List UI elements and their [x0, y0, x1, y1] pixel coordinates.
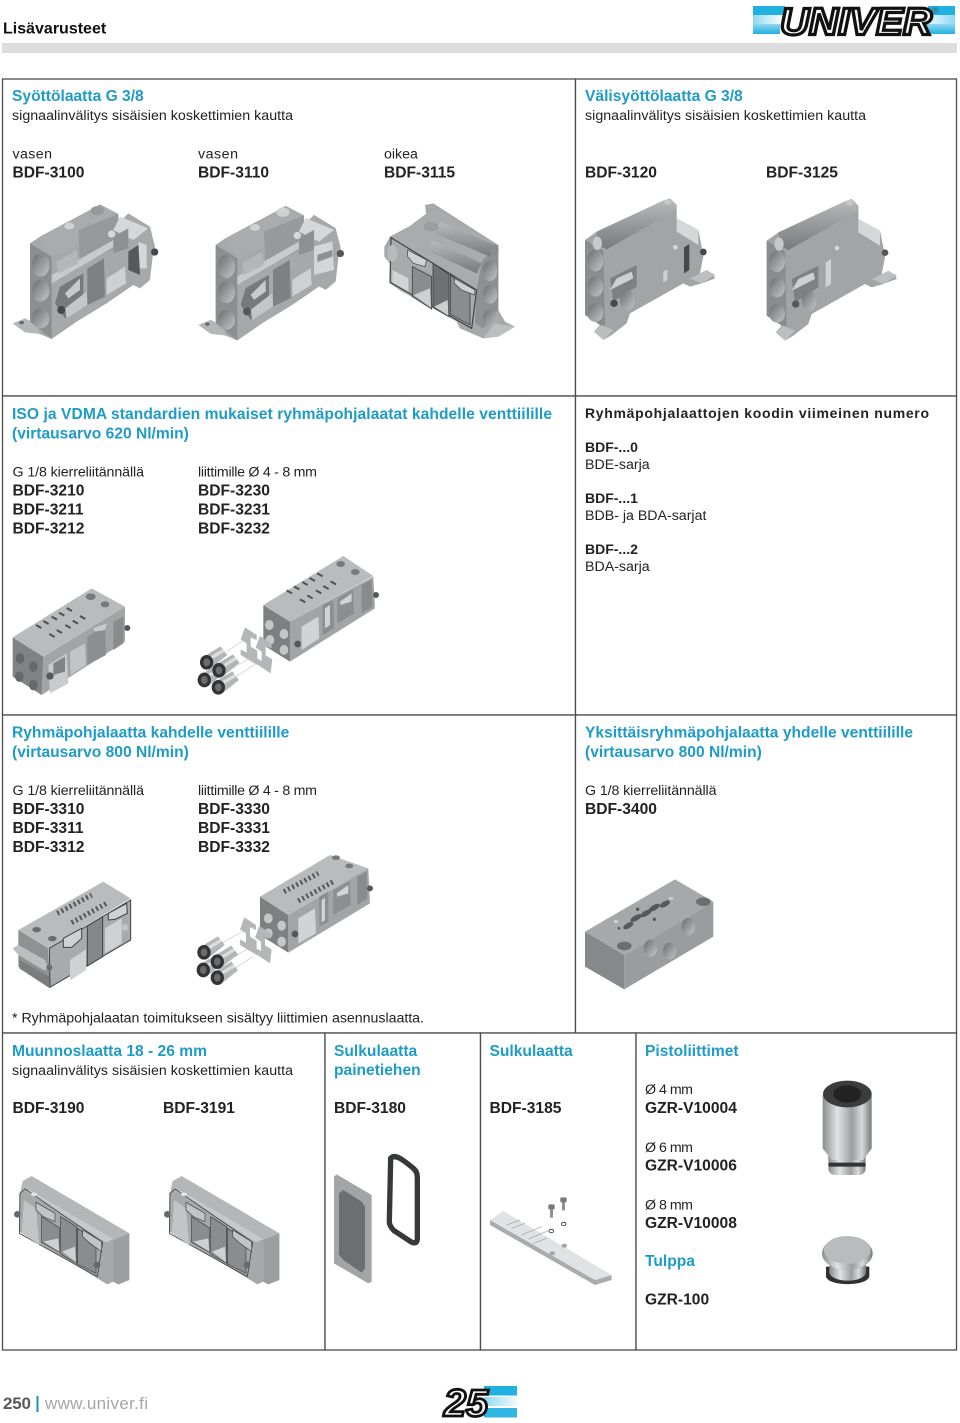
product: BDF-3100: [13, 204, 158, 339]
footer: page number and website: www.univer.fi: [44, 1394, 148, 1413]
heading: (virtausarvo 620 Nl/min): [12, 426, 189, 442]
code: [585, 783, 717, 818]
page title: Lisävarusteet: [3, 20, 107, 38]
panel: Pistoliittimet: [636, 1033, 956, 1350]
heading: (virtausarvo 800 Nl/min): [12, 744, 189, 761]
product: BDF-3230 with fittings: [198, 556, 379, 695]
code list: G 1/8: BDF-3310: [12, 801, 85, 818]
code key list: BDE-sarja: [585, 457, 650, 473]
heading: Sulkulaatta: [490, 1043, 573, 1060]
panel: Sulkulaatta painetiehen: [325, 1033, 480, 1350]
product: BDF-3120: [585, 198, 715, 340]
codes: BDF-3190: [12, 1100, 85, 1117]
codes: [12, 146, 455, 182]
code list: G 1/8: BDF-3212: [12, 520, 85, 538]
panel: Välisyöttölaatta G 3/8: [576, 79, 956, 396]
heading: Ryhmäpohjalaattojen koodin viimeinen numero: [585, 405, 929, 421]
codes: oikea: [384, 146, 418, 162]
codes: BDF-3115: [384, 164, 455, 182]
heading: [585, 724, 913, 761]
code list: liittimille: BDF-3232: [198, 520, 270, 538]
fitting codes: Ø 6 mm: [645, 1140, 693, 1156]
code list: liittimille: BDF-3330: [198, 801, 270, 818]
fitting codes: GZR-V10006: [645, 1158, 737, 1174]
product: BDF-3115: [384, 203, 515, 338]
code: BDF-3185: [490, 1100, 562, 1117]
product: BDF-3210: [13, 588, 130, 695]
code list: liittimille: BDF-3231: [198, 502, 270, 518]
code list: G 1/8: [12, 783, 144, 856]
code list: liittimille: [198, 783, 317, 856]
code list: liittimille: BDF-3331: [198, 820, 270, 837]
code key list: [585, 439, 706, 575]
code: BDF-3400: [585, 801, 657, 818]
code list: G 1/8: BDF-3312: [12, 839, 85, 856]
codes: BDF-3125: [766, 164, 838, 182]
logo: Univer: UNIVER: [780, 2, 933, 44]
fitting codes: GZR-V10004: [645, 1100, 737, 1117]
code list: liittimille: [198, 464, 317, 538]
header rule bar: [2, 43, 957, 53]
product: BDF-3400: [585, 879, 713, 989]
icon: push-in fitting: [823, 1081, 872, 1175]
subtitle: signaalinvälitys sisäisien koskettimien kautta: [12, 108, 293, 124]
heading: Syöttölaatta G 3/8: [12, 88, 144, 105]
panel: Ryhmäpohjalaattojen koodin viimeinen numero: [576, 396, 956, 715]
code list: liittimille: BDF-3230: [198, 482, 270, 500]
subtitle: signaalinvälitys sisäisien koskettimien kautta: [585, 108, 866, 124]
icon: plug: [822, 1236, 873, 1284]
heading: Sulkulaatta: [334, 1043, 418, 1060]
footnote: * Ryhmäpohjalaatan toimitukseen sisältyy liittimien asennuslaatta.: [12, 1010, 424, 1026]
panel: Ryhmäpohjalaatta kahdelle venttiilille: [2, 715, 576, 1033]
footer: page number and website: 250: [3, 1394, 31, 1413]
codes: [12, 1100, 235, 1117]
code list: G 1/8: BDF-3211: [12, 502, 84, 518]
code key list: BDF-...2: [585, 541, 638, 557]
panel: Yksittäisryhmäpohjalaatta: [576, 715, 956, 1033]
product: BDF-3185: [490, 1197, 612, 1285]
fitting codes: GZR-V10008: [645, 1215, 737, 1232]
heading: painetiehen: [334, 1062, 421, 1079]
code: BDF-3180: [334, 1100, 406, 1117]
heading: Ryhmäpohjalaatta kahdelle venttiilille: [12, 724, 290, 742]
codes: BDF-3191: [163, 1100, 235, 1117]
fitting codes: Ø 4 mm: [645, 1082, 693, 1098]
codes: BDF-3110: [198, 164, 269, 182]
product: BDF-3310: [13, 882, 131, 988]
code list: liittimille: liittimille Ø 4 - 8 mm: [198, 783, 317, 799]
code key list: BDA-sarja: [585, 559, 650, 575]
codes: vasen: [198, 146, 238, 162]
code: GZR-100: GZR-100: [645, 1292, 709, 1308]
fitting codes: [645, 1082, 737, 1232]
product: BDF-3190: [14, 1176, 129, 1284]
product: BDF-3330 with fittings: [197, 855, 373, 985]
fitting codes: Ø 8 mm: [645, 1198, 693, 1214]
heading: Muunnoslaatta 18 - 26 mm: [12, 1043, 207, 1060]
code list: G 1/8: BDF-3210: [12, 482, 85, 500]
heading: (virtausarvo 800 Nl/min): [585, 744, 762, 761]
product: BDF-3180 plate and ring: [334, 1157, 417, 1283]
product: BDF-3110: [198, 206, 344, 340]
heading: [12, 724, 290, 761]
code list: G 1/8: BDF-3311: [12, 820, 84, 837]
product: BDF-3125: [767, 199, 897, 341]
heading: ISO ja VDMA standardien mukaiset ryhmäpohjalaatat kahdelle venttiilille: [12, 406, 552, 423]
panel: ISO ja VDMA: [2, 396, 576, 715]
code list: liittimille: liittimille Ø 4 - 8 mm: [198, 464, 317, 480]
heading: Pistoliittimet: [645, 1043, 739, 1060]
codes: vasen: [12, 146, 52, 162]
code: G 1/8 kierreliitännällä: [585, 783, 717, 799]
codes: BDF-3100: [12, 164, 85, 182]
codes: [585, 164, 838, 182]
heading: [334, 1043, 421, 1079]
logo: Univer: ®: [932, 5, 939, 15]
code key list: BDB- ja BDA-sarjat: [585, 508, 706, 524]
logo: 25 years: [443, 1383, 517, 1423]
heading: Yksittäisryhmäpohjalaatta yhdelle venttiilille: [585, 724, 913, 742]
product: BDF-3191: [164, 1176, 279, 1284]
code list: G 1/8: G 1/8 kierreliitännällä: [12, 464, 144, 480]
code key list: BDF-...0: [585, 439, 638, 455]
panel: Muunnoslaatta 18 - 26 mm: [2, 1033, 325, 1350]
subtitle: signaalinvälitys sisäisien koskettimien kautta: [12, 1063, 293, 1079]
heading: Tulppa: Tulppa: [645, 1253, 695, 1270]
panel: Sulkulaatta: [480, 1033, 636, 1350]
code list: liittimille: BDF-3332: [198, 839, 270, 856]
codes: BDF-3120: [585, 164, 657, 182]
heading: Välisyöttölaatta G 3/8: [585, 88, 743, 105]
code list: G 1/8: [12, 464, 144, 538]
code list: G 1/8: G 1/8 kierreliitännällä: [12, 783, 144, 799]
panel: Syöttölaatta G 3/8: [2, 79, 576, 396]
heading: [12, 406, 552, 442]
code key list: BDF-...1: [585, 490, 638, 506]
